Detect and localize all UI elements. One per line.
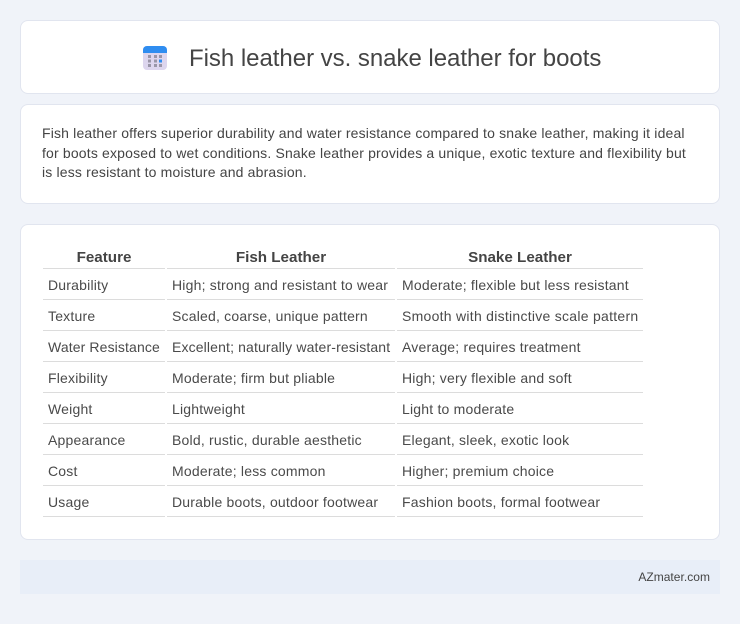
summary text: is less resistant to moisture and abrasion. <box>42 164 307 180</box>
column heading: Fish Leather: Fish Leather <box>236 249 326 266</box>
column heading: Snake Leather: Snake Leather <box>468 249 572 266</box>
row: Weight <box>48 401 514 417</box>
row: Water Resistance: Water Resistance <box>48 339 160 355</box>
header panel <box>20 20 720 94</box>
row: Appearance: Elegant, sleek, exotic look <box>402 432 569 448</box>
row: Usage <box>48 494 600 510</box>
row: Appearance: Appearance <box>48 432 126 448</box>
row: Cost: Higher; premium choice <box>402 463 554 479</box>
row: Durability <box>48 277 629 293</box>
row: Appearance <box>48 432 570 448</box>
row: Water Resistance <box>48 339 581 355</box>
row: Texture: Scaled, coarse, unique pattern <box>172 308 368 324</box>
row: Flexibility <box>48 370 572 386</box>
summary panel <box>20 104 720 204</box>
column heading: Feature: Feature <box>77 249 131 266</box>
row: Usage: Fashion boots, formal footwear <box>402 494 600 510</box>
row: Flexibility: Flexibility <box>48 370 108 386</box>
summary text: for boots exposed to wet conditions. Snake leather provides a unique, exotic texture and flexibility but <box>42 145 686 161</box>
row: Water Resistance: Excellent; naturally water-resistant <box>172 339 390 355</box>
row: Cost: Moderate; less common <box>172 463 326 479</box>
row: Water Resistance: Average; requires treatment <box>402 339 581 355</box>
row: Cost: Cost <box>48 463 78 479</box>
title: Fish leather vs. snake leather for boots <box>189 45 601 72</box>
table panel <box>20 224 720 540</box>
row: Texture: Smooth with distinctive scale pattern <box>402 308 638 324</box>
row: Durability: Moderate; flexible but less resistant <box>402 277 629 293</box>
row: Weight: Light to moderate <box>402 401 514 417</box>
row: Appearance: Bold, rustic, durable aesthetic <box>172 432 362 448</box>
footer credit: AZmater.com <box>638 570 710 584</box>
row: Weight: Weight <box>48 401 93 417</box>
row: Flexibility: High; very flexible and soft <box>402 370 572 386</box>
summary text <box>42 125 686 180</box>
row: Usage: Durable boots, outdoor footwear <box>172 494 378 510</box>
row: Texture <box>48 308 638 324</box>
icon: calendar <box>143 46 167 70</box>
footer bar <box>20 560 720 594</box>
row: Texture: Texture <box>48 308 95 324</box>
summary text: Fish leather offers superior durability and water resistance compared to snake leather, making it ideal <box>42 125 685 141</box>
row: Cost <box>48 463 554 479</box>
row: Durability: High; strong and resistant to wear <box>172 277 388 293</box>
row: Weight: Lightweight <box>172 401 245 417</box>
row: Durability: Durability <box>48 277 108 293</box>
row: Flexibility: Moderate; firm but pliable <box>172 370 335 386</box>
row: Usage: Usage <box>48 494 89 510</box>
